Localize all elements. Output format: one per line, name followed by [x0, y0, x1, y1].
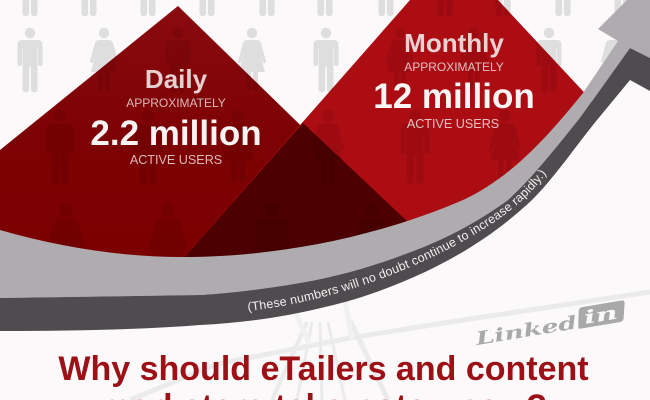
background bridge lines — [130, 292, 650, 400]
LinkedIn logo: in — [582, 302, 619, 329]
people overlay on the red triangles — [46, 0, 560, 257]
monthly stat text: 12 million — [373, 77, 535, 116]
daily stat text — [90, 64, 262, 167]
LinkedIn logo: Linked — [473, 312, 579, 350]
daily stat text: ACTIVE USERS — [130, 153, 222, 167]
LinkedIn logo — [472, 300, 628, 350]
monthly stat text — [373, 28, 535, 131]
title: Why should eTailers and content — [58, 350, 589, 388]
daily stat text: Daily — [145, 64, 208, 94]
triangle overlap — [184, 123, 407, 257]
daily stat text: 2.2 million — [90, 114, 262, 153]
text: (These numbers will no doubt continue to increase rapidly.) — [248, 170, 547, 314]
daily stat text: APPROXIMATELY — [126, 96, 226, 110]
monthly stat text: ACTIVE USERS — [407, 117, 499, 131]
red triangles, cut off along the arrow — [0, 0, 592, 257]
growth arrow: dark band — [0, 48, 650, 331]
panel: daily triangle — [0, 6, 300, 257]
monthly stat text: APPROXIMATELY — [404, 60, 504, 74]
monthly stat text: Monthly — [404, 28, 504, 58]
arrow caption — [248, 174, 546, 311]
people pattern — [18, 0, 634, 290]
growth arrow: light band — [0, 0, 650, 298]
panel: monthly triangle — [184, 0, 592, 257]
